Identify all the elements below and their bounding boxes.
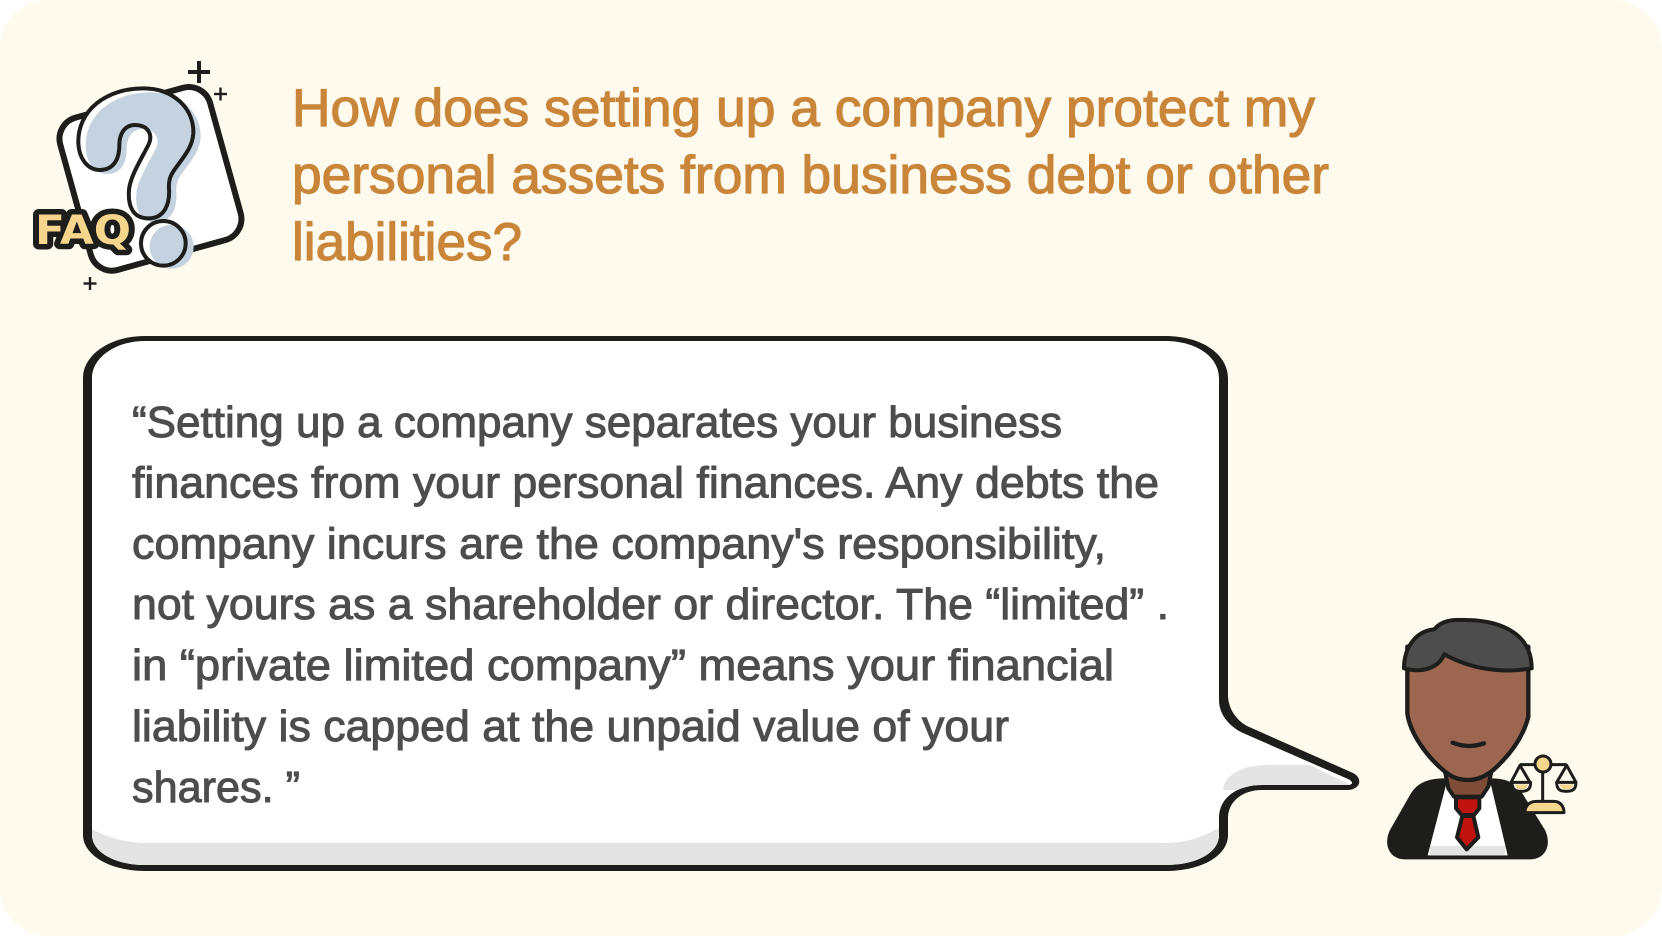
neck	[1445, 770, 1492, 797]
title	[292, 79, 1329, 272]
title: How does setting up a company protect my	[292, 79, 1316, 138]
icon: question mark	[78, 88, 201, 269]
title: liabilities?	[292, 213, 522, 272]
tie	[1456, 797, 1479, 815]
scales	[1511, 756, 1576, 813]
icon: sparkles	[84, 61, 227, 290]
body text: in “private limited company” means your financial	[132, 641, 1114, 690]
body text: finances from your personal finances. Any debts the	[132, 458, 1159, 508]
title: personal assets from business debt or other	[292, 146, 1329, 205]
body text	[132, 398, 1169, 812]
body text: “Setting up a company separates your business	[132, 398, 1062, 447]
speech bubble	[80, 336, 1360, 880]
face	[1407, 647, 1528, 780]
jacket	[1387, 778, 1548, 859]
icon: FAQ label: FAQ	[35, 208, 131, 254]
body text: company incurs are the company's responsibility,	[132, 520, 1106, 568]
icon: FAQ question mark	[35, 61, 246, 290]
body text: liability is capped at the unpaid value of your	[132, 702, 1009, 751]
hair	[1404, 620, 1532, 671]
body text: shares. ”	[132, 763, 300, 812]
icon: lawyer with scales	[1387, 620, 1576, 859]
shirt	[1428, 785, 1508, 855]
smile	[1453, 743, 1484, 746]
body text: not yours as a shareholder or director. The “limited” .	[132, 580, 1169, 629]
icon: tilted card	[54, 82, 246, 276]
